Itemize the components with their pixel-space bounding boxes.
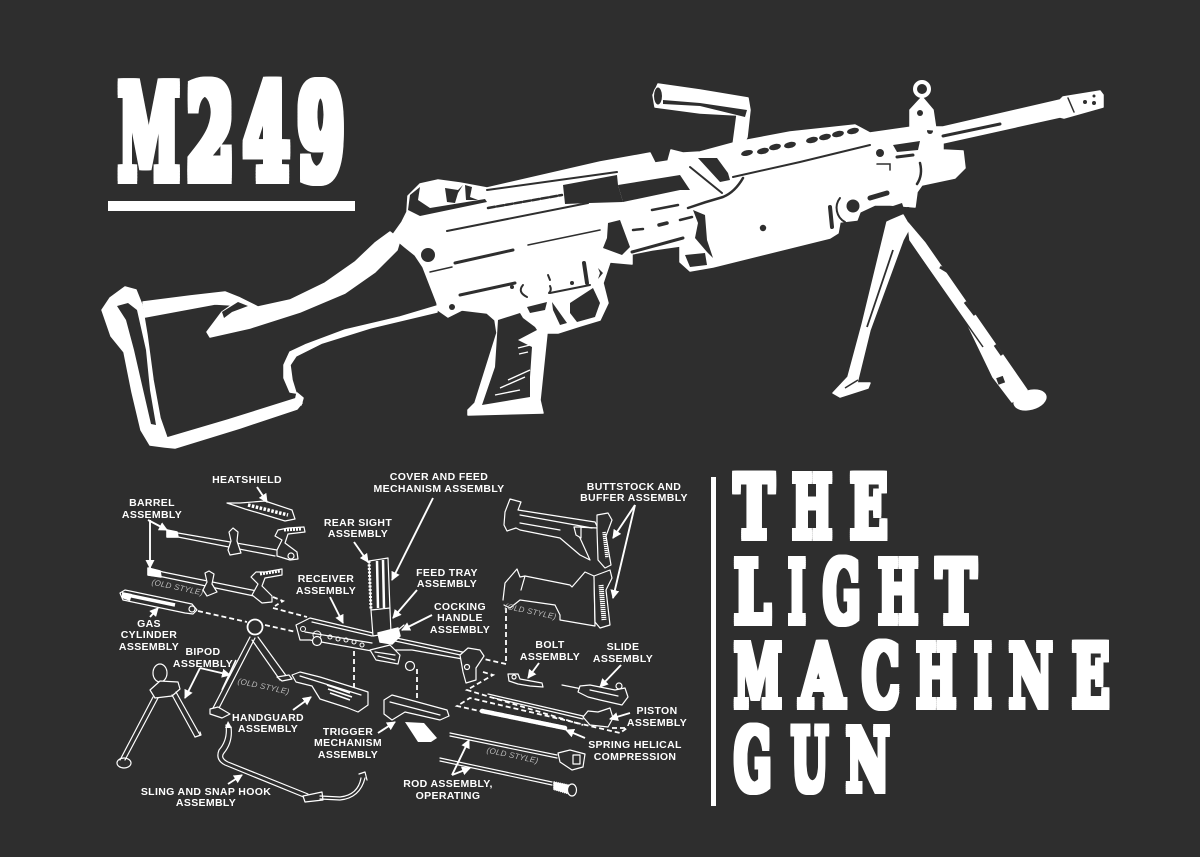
gun: front sight [910, 82, 936, 130]
part: rear sight and cover [369, 558, 404, 644]
heading: LIGHT [734, 543, 978, 643]
part: barrel assembly [167, 527, 305, 560]
part labels: ASSEMBLY [296, 585, 356, 597]
part labels: TRIGGER [323, 726, 373, 738]
part: barrel assembly old style [148, 568, 283, 606]
part labels: ASSEMBLY [173, 658, 233, 670]
heading: MACHINE: I [974, 627, 992, 727]
title: M249: 2 [186, 59, 235, 209]
part labels: HEATSHIELD [212, 474, 282, 486]
heading: LIGHT: L [734, 543, 771, 643]
part labels: ASSEMBLY [417, 578, 477, 590]
part: receiver assembly [296, 618, 484, 683]
part: rod assemblies [440, 733, 585, 796]
part labels: FEED TRAY [416, 567, 478, 579]
part labels: SLING AND SNAP HOOK [141, 786, 271, 798]
title: M249 [118, 59, 345, 209]
part labels: ASSEMBLY [593, 653, 653, 665]
part labels: BIPOD [185, 646, 221, 658]
part labels: SLIDE [607, 641, 639, 653]
part labels: ASSEMBLY [430, 624, 490, 636]
old style notes: (OLD STYLE) [486, 746, 539, 765]
part: piston [488, 694, 613, 727]
part labels: ASSEMBLY [176, 797, 236, 809]
part: trigger mechanism [384, 695, 449, 742]
part: bolt [508, 674, 543, 687]
heading: MACHINE: E [1072, 627, 1110, 727]
part labels: MECHANISM [314, 737, 382, 749]
gun: receiver, handguard and barrel body [392, 91, 1103, 415]
part labels: REAR SIGHT [324, 517, 392, 529]
part labels: ASSEMBLY [627, 717, 687, 729]
part labels: BUTTSTOCK AND [587, 481, 681, 493]
heading: LIGHT: I [788, 543, 806, 643]
heading: MACHINE: N [1009, 627, 1053, 727]
title: M249: M [118, 59, 180, 209]
part labels: ASSEMBLY [520, 651, 580, 663]
heading: MACHINE [734, 627, 1110, 727]
part: buttstock [504, 499, 612, 568]
heading: MACHINE: A [800, 627, 844, 727]
heading: GUN: U [791, 711, 828, 811]
part labels: COVER AND FEED [390, 471, 488, 483]
part labels: ASSEMBLY [238, 723, 298, 735]
part labels: BARREL [129, 497, 175, 509]
gun: buttstock [102, 232, 437, 448]
arrows [148, 487, 635, 784]
part labels: ASSEMBLY [119, 641, 179, 653]
heading: MACHINE: C [862, 627, 900, 727]
part labels: CYLINDER [121, 629, 177, 641]
heading: THE [732, 458, 888, 558]
old style notes: (OLD STYLE) [151, 578, 204, 597]
part: heatshield [227, 501, 295, 521]
gun: cutouts and detail lines [408, 127, 933, 405]
heading: GUN: N [846, 711, 890, 811]
heading: LIGHT: G [823, 543, 861, 643]
part labels: ASSEMBLY [328, 528, 388, 540]
heading: LIGHT: H [878, 543, 918, 643]
old style notes: (OLD STYLE) [237, 677, 290, 696]
title underline [108, 201, 355, 211]
part labels: BUFFER ASSEMBLY [580, 492, 688, 504]
heading: THE: H [792, 458, 832, 558]
vertical divider [711, 477, 716, 806]
part labels: COCKING [434, 601, 486, 613]
heading: GUN: G [734, 711, 772, 811]
heading: THE: T [734, 458, 774, 558]
part labels: OPERATING [416, 790, 480, 802]
part labels: COMPRESSION [594, 751, 676, 763]
part labels: ROD ASSEMBLY, [403, 778, 493, 790]
part: gas cylinder assembly [120, 590, 197, 614]
part: buttstock old style [503, 569, 612, 628]
title: M249: 9 [297, 59, 345, 209]
part labels: HANDLE [437, 612, 483, 624]
heading: MACHINE: M [734, 627, 782, 727]
part: bipod with ring [210, 620, 292, 718]
part: slide [562, 683, 628, 705]
part: spring [482, 711, 565, 728]
title: M249: 4 [243, 59, 290, 209]
part labels: HANDGUARD [232, 712, 304, 724]
part: handguard [292, 672, 368, 712]
old style notes: (OLD STYLE) [504, 602, 557, 621]
part labels: RECEIVER [298, 573, 354, 585]
part labels: SPRING HELICAL [588, 739, 682, 751]
part labels: GAS [137, 618, 161, 630]
part: sling and snap hook [218, 721, 367, 802]
part labels: BOLT [535, 639, 565, 651]
heading: MACHINE: H [916, 627, 956, 727]
part labels: PISTON [636, 705, 678, 717]
heading: LIGHT: T [936, 543, 976, 643]
part labels: ASSEMBLY [318, 749, 378, 761]
dashed assembly lines [198, 608, 627, 733]
part: bipod assembly [117, 664, 201, 768]
part labels: MECHANISM ASSEMBLY [374, 483, 504, 495]
heading: GUN [734, 711, 890, 811]
part labels [119, 471, 688, 809]
gun: bipod [833, 215, 1049, 414]
old style notes [151, 578, 557, 765]
gun: carry handle [653, 84, 750, 153]
heading: THE: E [850, 458, 888, 558]
part labels: ASSEMBLY [122, 509, 182, 521]
